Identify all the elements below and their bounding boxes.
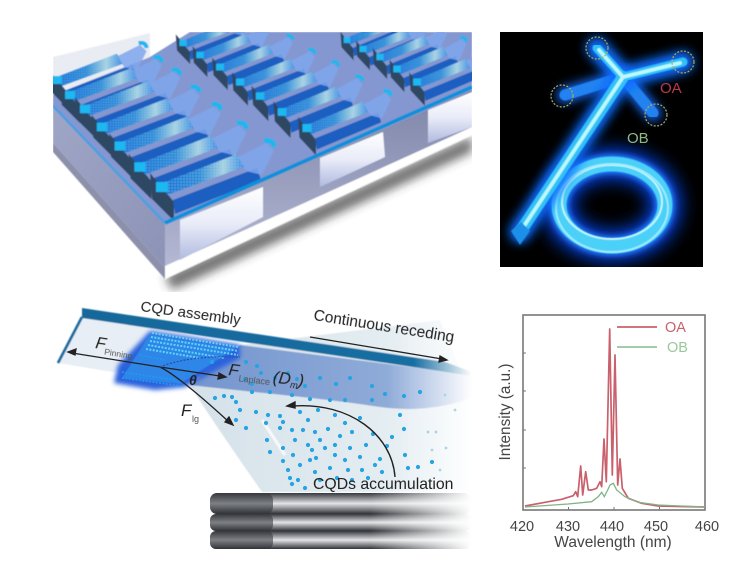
nanowire branches — [520, 48, 683, 232]
top bar — [82, 308, 472, 376]
label OA: OA — [660, 80, 682, 97]
OB spectrum — [525, 483, 705, 507]
back glass strip — [53, 33, 150, 95]
label continuous receding: Continuous receding — [312, 307, 455, 346]
OA spectrum — [525, 329, 705, 507]
label F pinning — [94, 333, 135, 361]
label F lg: lg — [192, 414, 199, 424]
channel group 3 — [340, 32, 472, 106]
substrate top surface — [53, 32, 472, 224]
ring resonator — [556, 164, 668, 252]
legend: OB — [667, 340, 688, 356]
legend — [617, 320, 688, 356]
label CQDs accumulation: CQDs accumulation — [313, 476, 453, 493]
legend: OA — [665, 320, 686, 336]
arrow receding — [310, 337, 447, 362]
receding meniscus shade — [190, 345, 472, 409]
front gap blocks — [180, 92, 472, 260]
label F laplace: ) — [295, 370, 305, 390]
faded far dots — [428, 395, 455, 470]
x tick labels: 430 — [556, 519, 580, 535]
dashed end markers — [551, 37, 694, 126]
panel: device array illustration — [53, 32, 472, 292]
glass edge — [53, 87, 472, 223]
x tick labels: 420 — [510, 519, 534, 535]
arrow accumulation — [287, 402, 395, 477]
fibre stack — [210, 490, 472, 552]
CQD assembly cluster — [114, 331, 240, 390]
label F lg — [181, 401, 199, 424]
label F pinning: Pinning — [104, 347, 133, 361]
substrate front face — [165, 90, 472, 268]
label F lg: F — [181, 401, 193, 420]
label F laplace: m — [290, 380, 299, 391]
label F laplace — [227, 360, 305, 391]
x tick labels: 440 — [600, 519, 624, 535]
panel: CQD assembly mechanism — [58, 298, 472, 552]
substrate left face — [53, 106, 165, 268]
panel: emission spectrum chart — [497, 315, 719, 551]
pale film under bar — [58, 318, 240, 372]
channel group 1 — [47, 43, 274, 221]
bottom white strip — [165, 127, 472, 279]
x tick labels: 460 — [695, 519, 719, 535]
label F pinning: F — [94, 333, 109, 354]
label F laplace: F — [228, 360, 242, 380]
y axis title: Intensity (a.u.) — [497, 364, 514, 460]
x tick labels — [510, 519, 719, 535]
label F laplace: (D — [272, 368, 292, 389]
substrate shadow — [165, 136, 472, 290]
rod base — [511, 222, 530, 245]
x tick labels: 450 — [644, 519, 668, 535]
x axis title: Wavelength (nm) — [554, 534, 672, 551]
channel group 2 — [175, 32, 394, 156]
CQD dots — [212, 362, 432, 488]
left leg — [58, 317, 82, 363]
white highlight — [262, 420, 285, 455]
label theta: θ — [189, 372, 197, 388]
label OB: OB — [627, 130, 649, 147]
label CQD assembly: CQD assembly — [139, 298, 242, 329]
left edge strip — [53, 143, 165, 279]
label F laplace: Laplace — [238, 373, 271, 387]
liquid bridge — [190, 320, 472, 492]
panel: glowing microlaser photo — [500, 32, 703, 267]
force arrows — [68, 349, 240, 425]
plot frame — [523, 315, 705, 510]
